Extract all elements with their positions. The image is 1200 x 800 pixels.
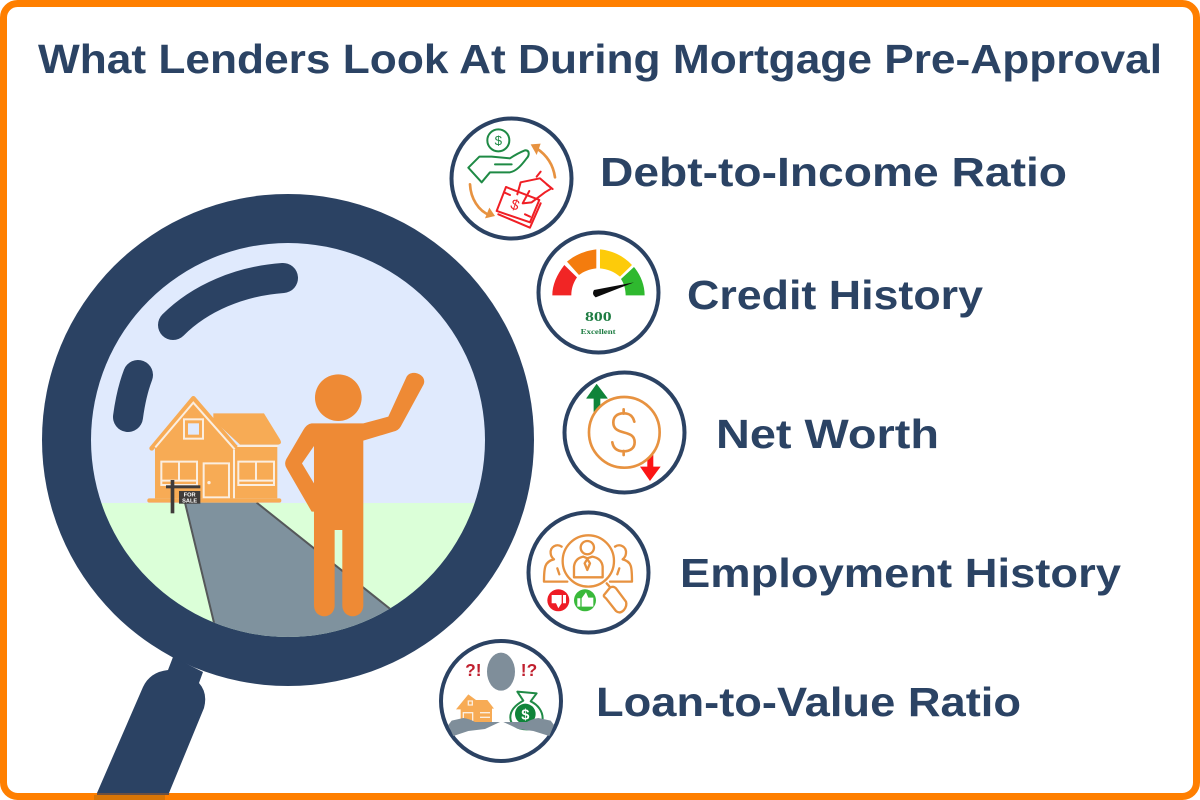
magnifying glass illustration (42, 194, 534, 793)
item: credit history (538, 232, 983, 352)
icon: credit score gauge (538, 232, 658, 352)
icon: candidates under magnifier (528, 512, 648, 632)
label: Net Worth (716, 411, 939, 457)
for sale sign (166, 480, 200, 513)
icon: hands holding house and money: !? (521, 660, 537, 680)
icon: credit score gauge: Excellent (581, 327, 616, 336)
item: employment history (528, 512, 1121, 632)
label: Employment History (680, 550, 1121, 596)
house (147, 398, 281, 513)
icon: credit score gauge: 800 (585, 309, 612, 324)
icon: hands exchanging money: $ (508, 197, 521, 215)
magnifier handle (97, 657, 205, 793)
lens glint large (173, 278, 283, 325)
person (285, 373, 424, 616)
for sale sign: SALE (182, 498, 197, 504)
for sale sign: FOR (184, 492, 196, 498)
title: What Lenders Look At During Mortgage Pre-Approval (38, 36, 1162, 82)
icon: dollar coin with arrows (564, 372, 684, 492)
icon: hands holding house and money (441, 641, 561, 761)
magnifier ring (42, 194, 534, 686)
item: debt-to-income ratio (452, 118, 1067, 238)
lens glint small (128, 375, 138, 417)
item: net worth (564, 372, 939, 492)
label: Credit History (687, 272, 983, 318)
icon: hands exchanging money: $ (495, 133, 503, 148)
label: Debt-to-Income Ratio (600, 149, 1067, 195)
icon: hands holding house and money: $ (521, 707, 529, 723)
item: loan-to-value ratio (441, 641, 1021, 761)
icon: hands exchanging money (452, 118, 572, 238)
icon: hands holding house and money: ?! (465, 660, 482, 680)
label: Loan-to-Value Ratio (596, 679, 1021, 725)
lens scene (91, 243, 485, 637)
